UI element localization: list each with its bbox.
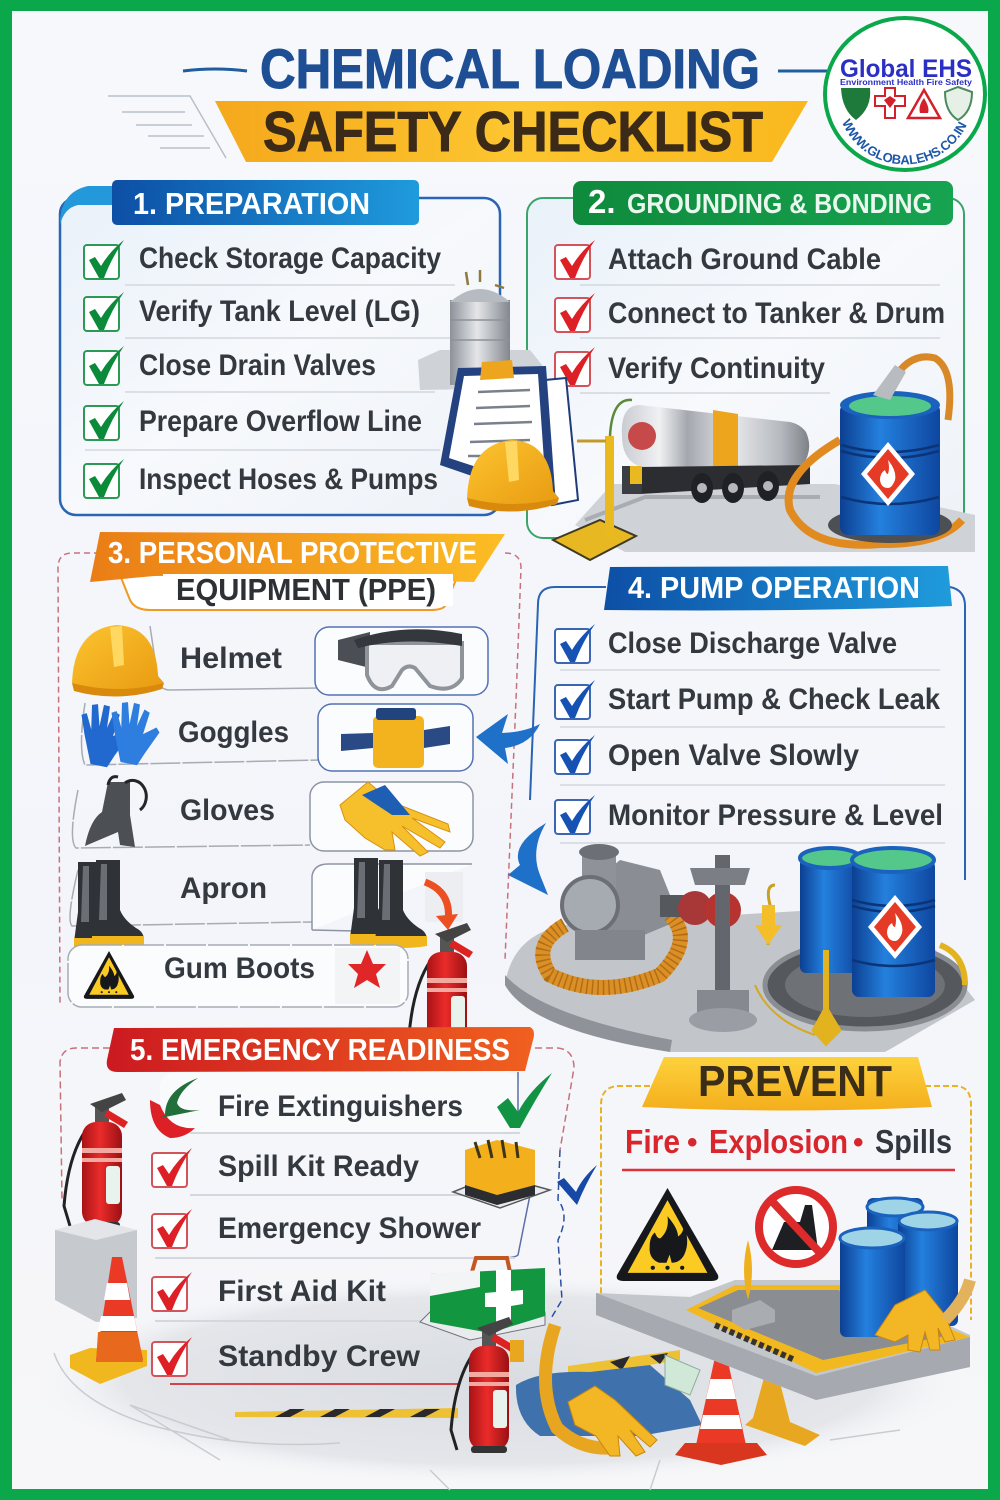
illustration: spill response on ground [235, 1317, 702, 1456]
checklist: emergency: Emergency Shower [218, 1212, 481, 1245]
checklist: pump: Open Valve Slowly [608, 739, 859, 772]
panel 2: grounding and bonding [527, 181, 964, 538]
checklist: preparation: Check Storage Capacity [139, 242, 441, 275]
illustration: spill kit [453, 1140, 550, 1208]
header: PPE: 3. PERSONAL PROTECTIVE [108, 535, 477, 570]
illustration: pump station [505, 844, 975, 1052]
row: gloves blue icon and goggles label: Goggles [178, 716, 289, 749]
checklist: preparation: Inspect Hoses & Pumps [139, 463, 438, 496]
arrow: blue curved left [476, 714, 540, 764]
checklist: grounding: Connect to Tanker & Drum [608, 297, 945, 330]
icon: flammable warning [617, 1188, 718, 1281]
icon: green check [497, 1073, 552, 1128]
checklist: emergency: Spill Kit Ready [218, 1150, 419, 1183]
row: boots icon and apron label: Apron [180, 872, 267, 905]
row: boots box [312, 858, 472, 948]
illustration: helmet [467, 440, 559, 512]
checklist: pump: Monitor Pressure & Level [608, 799, 943, 832]
header: grounding: GROUNDING & BONDING [627, 188, 932, 219]
text: hazards to prevent: • [687, 1126, 698, 1159]
illustration: first aid kit [420, 1258, 545, 1340]
logo: Global EHS: Environment Health Fire Safety [840, 77, 972, 87]
panel 4: pump operation [530, 566, 965, 880]
checklist: preparation: Close Drain Valves [139, 349, 376, 382]
text: hazards to prevent: Fire [625, 1123, 680, 1160]
checklist: pump: Start Pump & Check Leak [608, 683, 940, 716]
illustration: clipboard [440, 360, 578, 505]
header: pump operation: 4. PUMP OPERATION [628, 570, 920, 605]
row: respirator box [318, 704, 473, 771]
title: CHEMICAL LOADING [260, 37, 760, 100]
checklist: emergency [152, 1090, 481, 1376]
header: PPE: EQUIPMENT (PPE) [176, 572, 436, 607]
row: helmet: Helmet [180, 642, 282, 675]
panel 3: personal protective equipment [58, 532, 521, 1059]
icon: blue check [557, 1165, 597, 1205]
row: boots icon and apron label [70, 860, 312, 950]
subtitle banner: SAFETY CHECKLIST [263, 100, 763, 164]
icon: fire extinguisher [409, 923, 473, 1059]
checklist: grounding: Verify Continuity [608, 352, 825, 385]
illustration: cones on ground [675, 1357, 820, 1465]
logo: Global EHS: WWW.GLOBALEHS.CO.IN [842, 118, 966, 164]
header: grounding: 2. [588, 183, 616, 220]
text: hazards to prevent: Explosion [709, 1123, 848, 1160]
checklist: emergency: Standby Crew [218, 1340, 421, 1373]
header: prevent [642, 1057, 932, 1110]
icon: red and green swoosh [150, 1078, 200, 1138]
header: PPE [90, 532, 505, 610]
panel 5: emergency readiness [60, 1027, 574, 1384]
checklist: grounding [555, 240, 945, 386]
ground floor [30, 1275, 970, 1490]
row: gloves blue icon and goggles label [82, 702, 320, 767]
checklist: preparation [84, 240, 441, 498]
illustration: drum with hose [789, 357, 962, 545]
header: grounding [573, 181, 953, 225]
header: prevent: PREVENT [698, 1057, 892, 1106]
panel 1: preparation [60, 180, 500, 515]
arrow: blue curved down [508, 823, 548, 895]
header: preparation: 1. PREPARATION [133, 186, 370, 221]
header: emergency: 5. EMERGENCY READINESS [130, 1032, 510, 1067]
checklist: preparation: Verify Tank Level (LG) [139, 295, 420, 328]
illustration: extinguisher on pedestal [55, 1093, 137, 1322]
row: apron icon and gloves label [72, 777, 310, 848]
text: hazards to prevent: Spills [875, 1123, 952, 1160]
row: apron icon and gloves label: Gloves [180, 794, 275, 827]
checklist: preparation: Prepare Overflow Line [139, 405, 422, 438]
logo: Global EHS: Global EHS [840, 55, 972, 83]
panel: prevent [601, 1057, 971, 1320]
icon: prohibition sign [759, 1190, 833, 1264]
row: gum boots [68, 945, 408, 1007]
checklist: emergency: First Aid Kit [218, 1275, 386, 1308]
illustration: storage tank [418, 270, 542, 390]
checklist: grounding: Attach Ground Cable [608, 243, 881, 276]
illustration: containment platform with drums [596, 1198, 970, 1400]
row: goggles box [315, 627, 488, 695]
illustration: traffic cone [70, 1257, 147, 1384]
header: preparation [112, 180, 419, 225]
row: helmet [72, 625, 320, 697]
row: yellow gloves box [310, 782, 473, 856]
text: hazards to prevent [625, 1123, 952, 1160]
checklist: pump [555, 624, 943, 834]
checklist: emergency: Fire Extinguishers [218, 1090, 463, 1123]
logo: Global EHS [823, 16, 987, 172]
checklist: pump: Close Discharge Valve [608, 627, 897, 660]
text: hazards to prevent: • [853, 1126, 864, 1159]
row: gum boots: Gum Boots [164, 952, 315, 985]
illustration: grounded tanker [553, 400, 975, 560]
